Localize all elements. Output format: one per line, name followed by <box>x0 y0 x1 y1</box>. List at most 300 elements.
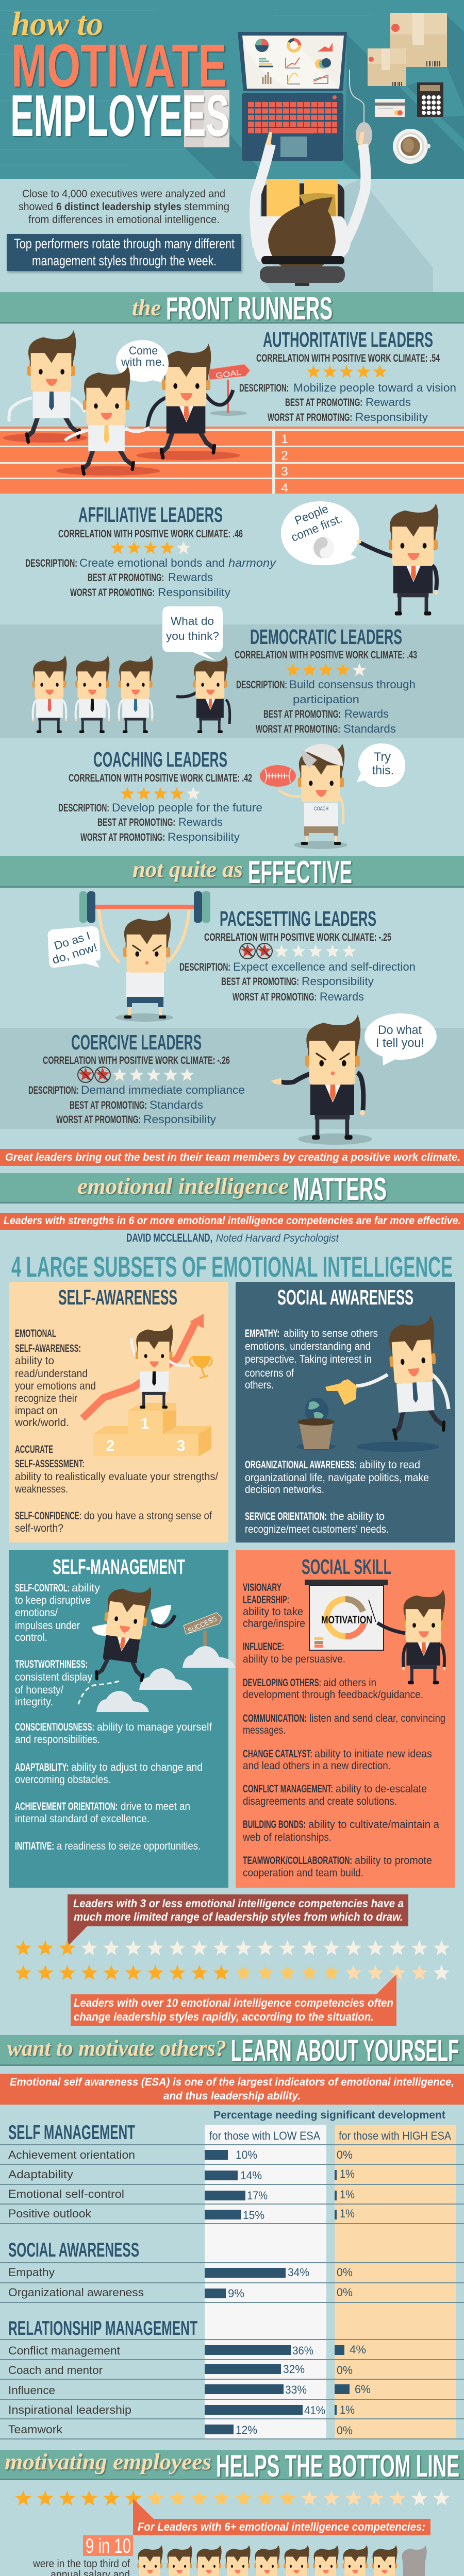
text: achievement orientation: ACHIEVEMENT ORIENTATION: <box>15 1801 118 1812</box>
callout bar: great leaders <box>0 1149 464 1166</box>
text: emotional self-awareness: work/world. <box>14 1417 69 1429</box>
panel: democratic band: Rewards <box>344 707 389 720</box>
text: communication <box>243 1713 445 1736</box>
panel: coercive leaders: CORRELATION WITH POSITIVE WORK CLIMATE: -.26 <box>43 1055 230 1066</box>
speech bubble: do what i tell you: Do what <box>378 1023 422 1037</box>
text: visionary leadership <box>243 1582 305 1630</box>
star row: 3 of 20 <box>15 1940 450 1955</box>
star rating <box>286 663 366 676</box>
panel: authoritative leaders: Rewards <box>366 396 411 409</box>
lane numbers: 3 <box>281 465 288 479</box>
panel: coercive leaders: Demand immediate compliance <box>81 1083 245 1096</box>
panel: coaching leaders: Responsibility <box>168 831 240 843</box>
panel: pacesetting leaders: Expect excellence and self-direction <box>233 960 416 973</box>
panel: pacesetting leaders: Rewards <box>320 990 364 1003</box>
column headers: for those with HIGH ESA <box>339 2129 451 2142</box>
banner: not quite as effective <box>0 855 464 890</box>
values: low ESA: 15% <box>243 2209 264 2222</box>
text: visionary leadership: ability to take <box>243 1606 303 1618</box>
panel: coaching leaders: DESCRIPTION: <box>58 802 109 814</box>
title: how to: how to <box>11 5 103 43</box>
text: conflict management: ability to de-escalate <box>336 1783 427 1795</box>
text: teamwork: cooperation and team build. <box>243 1867 363 1879</box>
illustration: climbing clouds to success <box>78 1581 235 1712</box>
panel: authoritative leaders: WORST AT PROMOTING: <box>268 412 352 423</box>
star rating <box>307 365 387 378</box>
text: emotional self-awareness: SELF-AWARENESS: <box>15 1343 81 1354</box>
row labels <box>8 2148 144 2436</box>
figure: democratic leader <box>176 655 230 733</box>
star rating <box>121 787 200 800</box>
text: change catalyst <box>243 1748 432 1772</box>
text: change catalyst: and lead others in a new direction. <box>243 1760 391 1772</box>
text: empathy: EMPATHY: <box>245 1328 279 1340</box>
text: developing others <box>243 1677 423 1701</box>
text: achievement orientation: drive to meet an <box>121 1801 190 1812</box>
column headers: for those with LOW ESA <box>209 2129 320 2142</box>
panel: affiliative leaders: Responsibility <box>158 586 230 599</box>
text: emotional self-awareness: ability to <box>15 1355 54 1367</box>
callout: 6+ competencies: For Leaders with 6+ emotional intelligence competencies: <box>138 2520 425 2533</box>
row labels: Organizational awareness <box>8 2286 144 2299</box>
figure: coach <box>279 743 347 849</box>
callout bar: ESA <box>0 2074 464 2105</box>
speech bubble: what do you think: What do <box>171 615 214 628</box>
speech bubble: come with me <box>116 340 169 382</box>
callout: top performers <box>7 234 241 271</box>
panel: coercive leaders: COERCIVE LEADERS <box>71 1030 202 1054</box>
panel: coaching leaders: Rewards <box>178 816 223 828</box>
text: influence: INFLUENCE: <box>243 1641 284 1653</box>
panel: coaching leaders: Develop people for the future <box>112 801 262 814</box>
panel: authoritative leaders: DESCRIPTION: <box>239 382 289 394</box>
section headings: SELF MANAGEMENT <box>8 2122 135 2144</box>
text: building bonds <box>242 1819 439 1843</box>
title: motivate: MOTIVATE <box>11 32 227 100</box>
row labels: Positive outlook <box>8 2207 92 2220</box>
banner: emotional intelligence matters: MATTERS <box>293 1172 387 1207</box>
text: top third <box>32 2558 130 2576</box>
row labels: Inspirational leadership <box>8 2403 131 2416</box>
panel: coercive leaders: WORST AT PROMOTING: <box>56 1114 141 1126</box>
panel: affiliative leaders: DESCRIPTION: <box>25 557 77 569</box>
star row: 10 plus of 20 <box>15 1965 450 1980</box>
text: emotional self-awareness: recognize their <box>15 1393 77 1404</box>
text: trustworthiness: consistent display <box>15 1671 92 1683</box>
text: developing others: development through feedback/guidance. <box>243 1689 423 1701</box>
panel: democratic band: participation <box>293 693 359 706</box>
text: influence: ability to be persuasive. <box>243 1653 345 1665</box>
text: emotional self-awareness <box>14 1328 96 1429</box>
values: low ESA: 17% <box>247 2189 268 2202</box>
panel: coercive leaders: DESCRIPTION: <box>28 1084 78 1096</box>
values: low ESA: 10% <box>236 2148 257 2161</box>
panel: affiliative leaders: harmony <box>228 556 277 569</box>
panel: affiliative leaders: Create emotional bonds and <box>79 556 225 569</box>
column headers: Percentage needing significant development <box>213 2109 445 2121</box>
speech bubble: what do you think: you think? <box>166 630 219 642</box>
text: self-control <box>15 1582 100 1643</box>
row labels: Influence <box>8 2384 55 2397</box>
text: emotional self-awareness: your emotions and <box>15 1380 96 1392</box>
text: conflict management: disagreements and create solutions. <box>243 1795 397 1807</box>
banner: emotional intelligence matters: emotional intelligence <box>77 1174 289 1199</box>
quote attribution: Noted Harvard Psychologist <box>216 1232 339 1244</box>
column headers <box>209 2109 451 2142</box>
icon: laptop <box>238 32 347 161</box>
panel: affiliative leaders: BEST AT PROMOTING: <box>88 572 164 584</box>
row labels: Coach and mentor <box>8 2364 103 2377</box>
values: high ESA: 1% <box>340 2207 355 2220</box>
values: low ESA: 41% <box>304 2404 325 2417</box>
speech bubble: do what i tell you: I tell you! <box>376 1036 424 1050</box>
icon: watering can <box>325 1379 357 1405</box>
figure: shirt runner <box>9 330 85 442</box>
figure: gray silhouette <box>401 2545 427 2576</box>
icon: credit card <box>375 99 405 117</box>
values: low ESA: 9% <box>228 2287 244 2300</box>
text: emotional self-awareness: EMOTIONAL <box>15 1328 56 1340</box>
figure: coercive leader <box>271 1015 372 1145</box>
text: emotional self-awareness: impact on <box>15 1405 58 1417</box>
row labels: Empathy <box>8 2266 55 2279</box>
bars: low ESA <box>205 2150 303 2434</box>
text: organizational awareness: decision networks. <box>245 1484 324 1496</box>
text: self-control: impulses under <box>15 1620 80 1632</box>
text: adaptability <box>15 1761 203 1786</box>
text: teamwork: TEAMWORK/COLLABORATION: <box>243 1855 352 1867</box>
text: empathy: perspective. Taking interest in <box>245 1353 372 1365</box>
lane numbers: 2 <box>281 449 288 463</box>
illustration: motivation presentation board <box>305 1580 445 1684</box>
figures: three team members <box>32 655 153 733</box>
intro text <box>19 188 229 226</box>
lane numbers: 1 <box>281 432 288 446</box>
panel: coaching leaders: CORRELATION WITH POSITIVE WORK CLIMATE: .42 <box>69 772 252 784</box>
values: high ESA <box>337 2148 371 2437</box>
panel: affiliative leaders <box>25 503 277 599</box>
section headings <box>8 2122 197 2340</box>
panel: coaching leaders <box>58 748 262 843</box>
panel: self-awareness <box>9 1282 228 1543</box>
text: change catalyst: CHANGE CATALYST: <box>243 1748 312 1760</box>
values: low ESA <box>228 2148 325 2436</box>
star rating <box>240 943 356 959</box>
panel: coaching leaders: COACHING LEADERS <box>93 748 227 771</box>
quote attribution: DAVID MCCLELLAND, <box>126 1231 212 1244</box>
text: adaptability: ADAPTABILITY: <box>15 1761 69 1773</box>
panel: democratic band: Standards <box>343 722 396 735</box>
star rating <box>111 541 190 554</box>
text: conscientiousness <box>15 1721 212 1745</box>
panel: coaching leaders: BEST AT PROMOTING: <box>97 817 175 828</box>
text: empathy <box>245 1328 378 1391</box>
text: achievement orientation: internal standard of excellence. <box>15 1813 150 1825</box>
text: visionary leadership: VISIONARY <box>243 1582 281 1594</box>
speech bubble: come with me: with me. <box>121 355 165 368</box>
text: service orientation <box>245 1511 389 1535</box>
banner: not quite as effective: EFFECTIVE <box>248 855 352 890</box>
panel: democratic band: Build consensus through <box>289 678 416 691</box>
person at desk <box>254 132 433 292</box>
values: high ESA: 1% <box>340 2188 355 2201</box>
star rating <box>78 1067 194 1082</box>
text: organizational awareness: ability to read <box>359 1459 420 1471</box>
panel: democratic band: BEST AT PROMOTING: <box>263 708 341 720</box>
callout: 3 or less competencies: much more limited range of leadership styles from which to draw. <box>74 1910 403 1923</box>
speech bubble: try this: Try <box>374 750 391 764</box>
text: empathy: ability to sense others <box>284 1328 378 1340</box>
callout: top performers: management styles through the week. <box>32 253 217 268</box>
bars: high ESA <box>335 2170 350 2415</box>
text: conflict management: CONFLICT MANAGEMENT: <box>243 1783 333 1795</box>
running track <box>0 411 464 495</box>
banner: emotional intelligence matters <box>0 1172 464 1207</box>
speech bubble: people come first <box>281 501 359 565</box>
text: accurate self-assessment: ability to realistically evaluate your strengths/ <box>15 1471 218 1483</box>
lane numbers <box>281 432 288 495</box>
text: achievement orientation <box>15 1801 190 1825</box>
row labels: Adaptability <box>8 2168 73 2181</box>
row labels: Emotional self-control <box>8 2188 124 2200</box>
panel: affiliative leaders: WORST AT PROMOTING: <box>70 587 155 599</box>
panel: authoritative leaders: Mobilize people toward a vision <box>293 381 456 394</box>
text: visionary leadership: charge/inspire <box>243 1618 305 1630</box>
text: communication: messages. <box>243 1724 286 1736</box>
notebook <box>184 90 229 147</box>
banner: not quite as effective: not quite as <box>132 857 243 882</box>
icon: barbell <box>79 891 210 923</box>
text: emotional self-awareness: read/understand <box>15 1368 88 1380</box>
star row: 6 of 20 <box>15 2490 450 2505</box>
text: organizational awareness: organizational life, navigate politics, make <box>245 1472 429 1484</box>
icon: goal sign: GOAL <box>215 368 242 380</box>
stat: 9 in 10: 9 in 10 <box>86 2535 131 2557</box>
text: accurate self-assessment: SELF-ASSESSMENT: <box>15 1458 85 1470</box>
icon: calculator <box>417 82 443 117</box>
figure: leader with suit <box>147 344 233 457</box>
text: teamwork <box>243 1855 432 1879</box>
speech bubble: do as i do now: Do as I <box>53 929 92 952</box>
intro text: from differences in emotional intelligence. <box>28 214 220 226</box>
icon: cardboard boxes <box>368 13 447 86</box>
panel: coercive leaders: Responsibility <box>143 1113 216 1126</box>
illustration: watering the globe <box>296 1314 449 1452</box>
text: building bonds: BUILDING BONDS: <box>243 1819 306 1831</box>
figure: affiliative leader <box>357 503 438 616</box>
text: conscientiousness: CONSCIENTIOUSNESS: <box>15 1721 94 1733</box>
text: adaptability: ability to adjust to change and <box>71 1761 203 1773</box>
callout bar: ESA: Emotional self awareness (ESA) is one of the largest indicators of emotional intelligence, <box>10 2076 454 2088</box>
illustration: podium and winner: 3 <box>177 1437 185 1454</box>
callout bar: quote <box>0 1213 464 1230</box>
text: influence <box>243 1641 345 1665</box>
row labels: Conflict management <box>8 2344 120 2357</box>
text: conscientiousness: and responsibilities. <box>15 1734 100 1745</box>
text: service orientation: recognize/meet customers' needs. <box>245 1523 389 1535</box>
table: percentage needing development <box>0 2109 464 2439</box>
values: high ESA: 1% <box>340 2167 355 2180</box>
values: high ESA: 0% <box>337 2148 353 2161</box>
text: trustworthiness: of honesty/ <box>15 1684 63 1696</box>
section headings: SOCIAL AWARENESS <box>8 2239 139 2261</box>
panel: affiliative leaders: CORRELATION WITH POSITIVE WORK CLIMATE: .46 <box>58 528 243 540</box>
header panel <box>0 0 464 179</box>
panel: coercive leaders: Standards <box>150 1098 203 1111</box>
values: low ESA: 32% <box>283 2363 305 2376</box>
values: low ESA: 34% <box>288 2266 309 2279</box>
text: trustworthiness <box>15 1658 92 1708</box>
text: self-confidence: SELF-CONFIDENCE: <box>15 1510 81 1522</box>
text: trustworthiness: integrity. <box>15 1696 53 1708</box>
panel: pacesetting leaders: BEST AT PROMOTING: <box>221 976 299 988</box>
text: self-control: to keep disruptive <box>15 1595 91 1606</box>
text: empathy: others. <box>245 1379 274 1391</box>
text: initiative: INITIATIVE: <box>15 1840 54 1852</box>
icon: wings <box>92 1605 171 1638</box>
panel: affiliative leaders: AFFILIATIVE LEADERS <box>78 503 223 527</box>
values: low ESA: 14% <box>240 2169 262 2182</box>
values: low ESA: 33% <box>285 2383 307 2396</box>
text: communication: COMMUNICATION: <box>243 1713 307 1724</box>
panel: self-awareness: SELF-AWARENESS <box>58 1285 177 1309</box>
coach shirt label: COACH <box>314 806 328 812</box>
panel: authoritative leaders <box>239 328 456 423</box>
intro text: Close to 4,000 executives were analyzed and <box>22 188 225 200</box>
intro text: stemming <box>184 201 229 213</box>
figures: 9 of 10 leaders <box>137 2545 427 2576</box>
speech bubble: try this <box>357 743 405 787</box>
banner: helps the bottom line <box>0 2449 464 2483</box>
panel: authoritative leaders: BEST AT PROMOTING: <box>285 397 362 409</box>
values: high ESA: 0% <box>337 2266 353 2279</box>
panel: pacesetting leaders: DESCRIPTION: <box>179 961 230 973</box>
values: high ESA: 0% <box>337 2424 353 2437</box>
text: self-confidence <box>15 1510 212 1534</box>
icon: success sign: SUCCESS <box>187 1614 218 1635</box>
speech bubble: people come first: People <box>293 502 330 527</box>
speech bubble: people come first: come first. <box>289 512 344 544</box>
panel: self-management <box>9 1550 235 1888</box>
illustration: podium and winner: 1 <box>141 1415 149 1432</box>
panel: democratic band <box>0 606 464 738</box>
text: visionary leadership: LEADERSHIP: <box>243 1594 289 1606</box>
text: organizational awareness <box>245 1459 429 1496</box>
panel: social skill: SOCIAL SKILL <box>302 1555 391 1579</box>
values: high ESA: 4% <box>350 2343 366 2356</box>
icon: success sign <box>184 1613 222 1646</box>
text: teamwork: ability to promote <box>355 1855 432 1867</box>
text: top third: were in the top third of <box>32 2558 130 2570</box>
text: trustworthiness: TRUSTWORTHINESS: <box>15 1658 88 1670</box>
callout: 3 or less competencies <box>68 1894 408 1946</box>
text: building bonds: ability to cultivate/maintain a <box>308 1819 439 1831</box>
icon: mouse <box>350 70 372 148</box>
intro text: showed <box>19 201 53 213</box>
panel: democratic band: WORST AT PROMOTING: <box>256 723 340 735</box>
icon: trophy <box>190 1356 212 1378</box>
speech bubble: try this: this. <box>372 764 394 777</box>
row labels: Teamwork <box>8 2423 63 2436</box>
values: high ESA: 0% <box>337 2364 353 2377</box>
text: communication: listen and send clear, convincing <box>309 1713 445 1724</box>
text: service orientation: the ability to <box>330 1511 385 1522</box>
title: employees: EMPLOYEES <box>10 83 229 149</box>
panel: coercive leaders: BEST AT PROMOTING: <box>70 1099 147 1111</box>
text: developing others: DEVELOPING OTHERS: <box>243 1677 321 1689</box>
callout: 6+ competencies <box>133 2499 430 2535</box>
icon: goal sign <box>208 364 250 413</box>
callout: over 10 competencies <box>71 1974 396 2026</box>
banner: learn about yourself <box>0 2034 464 2067</box>
illustration: podium and winner: 2 <box>106 1437 114 1454</box>
callout: over 10 competencies: change leadership styles rapidly, according to the situation. <box>74 2010 374 2023</box>
quote attribution <box>126 1231 339 1244</box>
text: empathy: concerns of <box>245 1367 294 1379</box>
text: service orientation: SERVICE ORIENTATION: <box>245 1511 327 1522</box>
text: accurate self-assessment <box>14 1444 218 1495</box>
lane numbers: 4 <box>281 481 288 495</box>
icon: coffee cup <box>393 129 430 164</box>
intro text: 6 distinct leadership styles <box>56 201 181 213</box>
callout bar: great leaders: Great leaders bring out the best in their team members by creating a positive work climate. <box>5 1151 460 1163</box>
icon: globe in pot <box>297 1398 335 1449</box>
speech bubble: what do you think <box>162 606 223 661</box>
callout: top performers: Top performers rotate through many different <box>14 236 235 251</box>
icon: yin yang <box>313 537 334 558</box>
text: self-confidence: self-worth? <box>15 1522 63 1534</box>
text: accurate self-assessment: ACCURATE <box>15 1444 53 1455</box>
speech bubble: come with me: Come <box>129 344 158 357</box>
values: high ESA: 1% <box>340 2403 355 2416</box>
callout: over 10 competencies: Leaders with over 10 emotional intelligence competencies often <box>74 1996 393 2009</box>
icon: football <box>260 765 296 787</box>
text: developing others: aid others in <box>323 1677 376 1689</box>
panel: pacesetting leaders <box>179 907 416 1003</box>
text: initiative <box>15 1840 201 1852</box>
banner: the front runners: the <box>132 295 161 320</box>
panel: self-management: SELF-MANAGEMENT <box>53 1555 185 1579</box>
text: initiative: a readiness to seize opportunities. <box>57 1840 201 1852</box>
values: high ESA: 6% <box>355 2383 371 2396</box>
speech bubble: do as i do now <box>47 926 101 968</box>
text: organizational awareness: ORGANIZATIONAL AWARENESS: <box>245 1459 357 1471</box>
text: self-control: control. <box>15 1632 47 1643</box>
values: low ESA: 12% <box>236 2424 257 2436</box>
text: conflict management <box>243 1783 427 1807</box>
speech bubble: do as i do now: do, now! <box>51 941 98 967</box>
text: self-confidence: do you have a strong sense of <box>84 1510 212 1522</box>
banner: learn about yourself: want to motivate others? <box>7 2036 226 2061</box>
text: change catalyst: ability to initiate new ideas <box>314 1748 432 1760</box>
callout: 3 or less competencies: Leaders with 3 or less emotional intelligence competencies have a <box>73 1897 404 1910</box>
values: high ESA: 0% <box>337 2286 353 2299</box>
panel: coercive leaders <box>0 1028 464 1129</box>
banner: helps the bottom line: motivating employees <box>5 2449 211 2475</box>
text: empathy: emotions, understanding and <box>245 1341 371 1352</box>
text: self-control: ability <box>72 1582 100 1594</box>
values: low ESA: 36% <box>292 2344 313 2357</box>
section headings: RELATIONSHIP MANAGEMENT <box>8 2317 197 2340</box>
board label: MOTIVATION <box>321 1614 372 1626</box>
banner: the front runners: FRONT RUNNERS <box>166 291 333 327</box>
banner: the front runners <box>0 291 464 327</box>
text: conscientiousness: ability to manage yourself <box>97 1721 212 1733</box>
panel: authoritative leaders: Responsibility <box>355 411 428 423</box>
panel: coaching leaders: WORST AT PROMOTING: <box>80 832 165 843</box>
text: adaptability: overcoming obstacles. <box>15 1774 111 1786</box>
text: accurate self-assessment: weaknesses. <box>14 1483 68 1495</box>
